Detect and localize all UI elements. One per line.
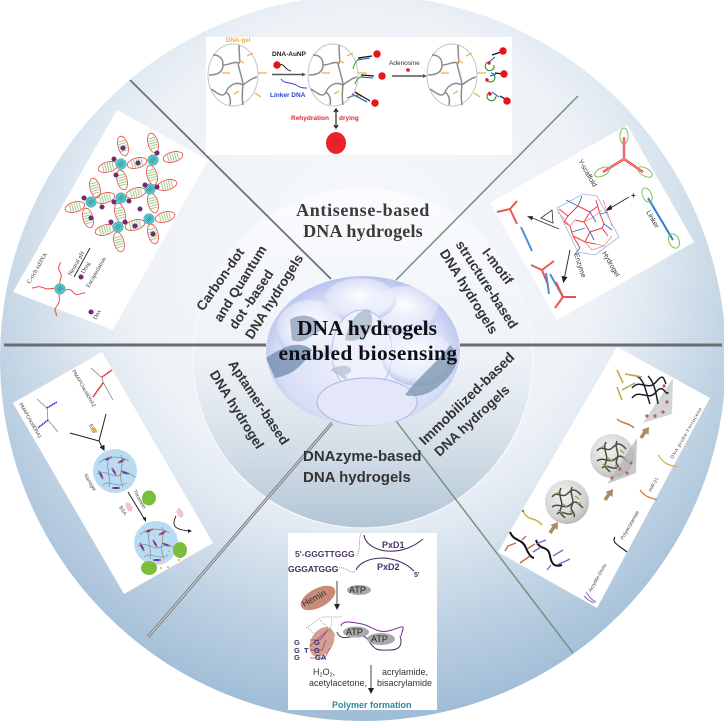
- double arrow: [334, 109, 338, 128]
- merging arrows: [70, 414, 106, 450]
- G-quadruplex: T: [304, 646, 309, 655]
- BSA released: [175, 507, 185, 519]
- G-quadruplex: [294, 617, 342, 662]
- heading: DNA hydrogels antisense: DNA hydrogels: [303, 221, 423, 241]
- gel sphere 3: [632, 376, 673, 423]
- scaffold fragment 3: [555, 282, 576, 308]
- linker fragment 2: [546, 273, 563, 297]
- acrydite polymer chains: [505, 532, 570, 570]
- polymer legend: [614, 537, 627, 552]
- thrombin bound: [141, 542, 187, 575]
- strand GGGATGGG: GGGATGGG: [288, 564, 339, 574]
- heading: Carbon-dot: [193, 243, 306, 342]
- label: PMAPC/acidDNA2: PMAPC/acidDNA2: [70, 369, 97, 409]
- probe legend: [658, 455, 677, 467]
- label: Thrombin: Thrombin: [131, 489, 147, 510]
- reagent text left: O: [323, 667, 330, 677]
- free probes: [617, 370, 642, 400]
- label: PMAPC/acidDNA1: PMAPC/acidDNA1: [17, 402, 43, 440]
- EtBr icon: [92, 427, 98, 433]
- heading: I-motif: DNA hydrogels: [437, 247, 501, 337]
- ATP bound 2: ATP: [371, 634, 388, 644]
- reagent text right: acrylamide,: [382, 667, 428, 677]
- panel: carbon-dot DNA lattice: [13, 110, 208, 330]
- tan arrow 1: [550, 522, 558, 533]
- arrow to hydrogel: [606, 197, 629, 210]
- hydrogel sphere 2: [308, 44, 386, 107]
- enzyme arrow: [562, 250, 570, 282]
- gel sphere 1: [545, 480, 589, 524]
- heading: Antisense-based: Antisense-based: [296, 200, 430, 220]
- label: 5': 5': [414, 572, 420, 579]
- label: Rehydration: Rehydration: [291, 115, 329, 122]
- heading: Carbon-dot: Carbon-dot: [193, 245, 248, 314]
- heading: Aptamer-based: DNA hydrogel: [207, 368, 267, 452]
- arrowhead: [302, 72, 306, 76]
- heading: Aptamer-based: Aptamer-based: [225, 357, 292, 448]
- label: Hydrogel: Hydrogel: [600, 250, 621, 279]
- center image: hydrogel droplets: [266, 276, 460, 426]
- arrowhead: [142, 517, 146, 522]
- label: Encapsulation: Encapsulation: [86, 257, 108, 289]
- strand label: 5'-GGGTTGGG: [295, 549, 355, 559]
- acrydite legend: [584, 592, 596, 603]
- miR legend: [640, 490, 657, 500]
- label: Polyacrylamide: Polyacrylamide: [620, 510, 641, 541]
- reagent text left: H: [313, 667, 320, 677]
- ATP bound 1: ATP: [346, 627, 363, 637]
- label: miR-21: miR-21: [648, 476, 661, 493]
- panel: antisense aptamer gel schematic: [206, 37, 512, 155]
- linker strand: [281, 79, 307, 88]
- DNA probe: [522, 510, 542, 525]
- nanogel sphere 2: [134, 521, 178, 565]
- scaffold fragment 2: [531, 261, 554, 285]
- hydrogel sphere 1: [208, 44, 267, 106]
- ATP bound 1: [343, 626, 369, 638]
- heading: DNA hydrogels DNAzyme: DNA hydrogels: [303, 469, 411, 486]
- label: Enzyme: Enzyme: [572, 252, 587, 279]
- label: Drug: Drug: [81, 261, 92, 275]
- plus sign: +: [631, 191, 636, 200]
- arrowhead: [188, 529, 192, 533]
- arrow down: [336, 581, 338, 604]
- label: C-rich ssDNA: C-rich ssDNA: [27, 252, 49, 285]
- release arrow: [174, 516, 191, 531]
- heading: Carbon-dot: DNA hydrogels: [242, 252, 306, 342]
- reagent text left: acetylacetone,: [309, 678, 367, 688]
- label: Linker DNA: Linker DNA: [270, 92, 306, 99]
- miR-21 strand: [617, 419, 634, 428]
- hydrogel network: [557, 194, 619, 255]
- arrow to fragments: [528, 216, 559, 229]
- linker fragment 1: [521, 227, 532, 251]
- label: DNA-gel: DNA-gel: [226, 37, 251, 44]
- title: DNA hydrogels: DNA hydrogels: [297, 316, 437, 340]
- polymer 2: [91, 368, 113, 400]
- label: drying: drying: [339, 115, 359, 122]
- gel sphere 2: [590, 434, 637, 484]
- icon: gold nanoparticle with strand: [273, 61, 291, 71]
- label: Nanogel: Nanogel: [82, 473, 97, 492]
- icon: dried gel: [326, 132, 346, 154]
- arrowhead 2: [368, 688, 374, 694]
- G-quadruplex: G: [314, 646, 320, 655]
- arrowhead: [334, 604, 340, 610]
- panel: immobilized hydrogel: [498, 347, 710, 608]
- BSA icon: [124, 501, 134, 513]
- inner ring: [193, 188, 533, 528]
- Y-scaffold: [593, 128, 654, 179]
- heading: Immobilized-based: Immobilized-based: [416, 349, 517, 448]
- label: BSA: BSA: [117, 505, 128, 517]
- label: PxD2: PxD2: [377, 562, 400, 572]
- reagent text left: 2: [320, 672, 323, 678]
- polymer 1: [37, 399, 58, 432]
- thrombin icon: [142, 490, 156, 506]
- signal sparks: [160, 550, 180, 569]
- heading: I-motif: I-motif: [479, 245, 516, 288]
- panel: aptamer hydrogel: [13, 352, 213, 594]
- reagent text left: [309, 667, 367, 688]
- reagent text right: bisacrylamide: [377, 678, 432, 688]
- reagent text left: ,: [333, 667, 335, 677]
- ATP: ATP: [349, 585, 366, 595]
- PxD1 strand: [357, 533, 423, 556]
- G-quadruplex: GA: [315, 653, 327, 662]
- G-quadruplex: G: [294, 646, 300, 655]
- PxD2 strand: [339, 558, 414, 572]
- title: enabled biosensing: enabled biosensing: [279, 341, 457, 365]
- heading: Immobilized-based: DNA hydrogels: [431, 382, 513, 459]
- label: DNA probe-Ferrocene: DNA probe-Ferrocene: [670, 406, 704, 460]
- nanogel sphere 1: [93, 449, 137, 493]
- Hemin: Hemin: [300, 588, 328, 609]
- G-quadruplex: G: [294, 653, 300, 662]
- divider lines: [4, 80, 722, 653]
- tan arrow 2: [605, 489, 613, 500]
- label: Polymer formation: Polymer formation: [332, 700, 412, 710]
- ATP-bound strands: [337, 622, 403, 650]
- hydrogel sphere 3: [427, 44, 511, 106]
- Linker: [640, 186, 682, 250]
- nodes: [86, 154, 158, 232]
- label: Y-scaffold: Y-scaffold: [576, 158, 598, 188]
- arrow to sphere 2: [128, 492, 145, 520]
- label: Linker: Linker: [644, 210, 660, 230]
- ATP bound 2: [367, 633, 395, 645]
- heading: Carbon-dot: and Quantum: [211, 243, 270, 324]
- G-quadruplex: G: [314, 638, 320, 647]
- pH arrow: [74, 248, 90, 277]
- G-quadruplex: G: [294, 638, 300, 647]
- heading: DNAzyme-based: DNAzyme-based: [303, 448, 421, 465]
- panel: DNAzyme hydrogel: [288, 533, 437, 710]
- label: DNA-AuNP: DNA-AuNP: [272, 51, 307, 58]
- scaffold fragment 1: [497, 201, 517, 224]
- adenosine arrow: [392, 68, 427, 78]
- label: Acrydite-DNAs: Acrydite-DNAs: [588, 562, 609, 593]
- Hemin: [297, 581, 339, 615]
- label: Neutral pH: Neutral pH: [68, 250, 86, 277]
- tan arrow 3: [641, 427, 649, 438]
- heading: Carbon-dot: dot -based: [226, 267, 277, 332]
- panel: i-motif hydrogel: [490, 125, 694, 320]
- arrow down 2: [370, 665, 372, 688]
- C-rich ssDNA star: [32, 262, 85, 316]
- encapsulated dox dots: [79, 146, 159, 314]
- heading: I-motif: structure-based: [453, 238, 521, 331]
- label: Adenosine: Adenosine: [389, 60, 420, 67]
- label: Dox: Dox: [93, 309, 103, 321]
- reagent text right: [377, 667, 432, 688]
- label: EtBr: EtBr: [87, 423, 97, 435]
- triangle delta: [541, 210, 553, 223]
- label: PxD1: PxD1: [382, 540, 405, 550]
- hydrogel loops: [64, 132, 184, 253]
- arrow: [272, 74, 302, 76]
- reagent text left: 2: [330, 672, 333, 678]
